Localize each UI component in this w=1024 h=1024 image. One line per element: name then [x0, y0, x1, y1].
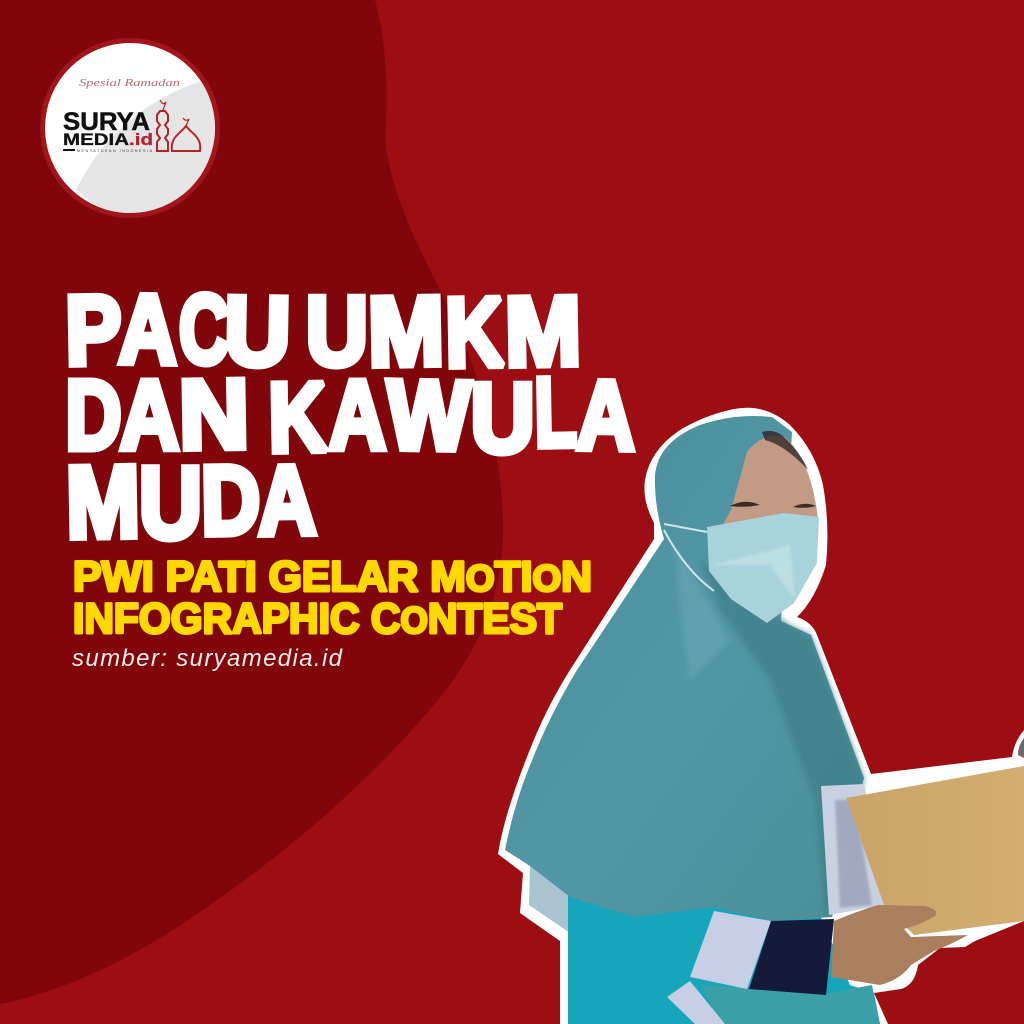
title word DAN	[66, 358, 250, 470]
title word PACU: C	[179, 274, 229, 384]
title word MUDA: A	[257, 445, 317, 555]
logo grey sheen	[76, 81, 215, 213]
title word KAWULA: A	[576, 360, 636, 470]
book	[821, 784, 885, 915]
white sticker outline	[498, 408, 1024, 1024]
under-scarf strip	[529, 866, 570, 933]
logo underline	[63, 149, 75, 151]
mask ear loop	[664, 524, 714, 591]
hijab highlight	[675, 545, 730, 680]
logo SURYA: SURYA	[63, 108, 150, 136]
shirt lower panel	[700, 985, 880, 1024]
dark wavy blob	[0, 0, 503, 1004]
envelope	[846, 766, 1024, 935]
title word KAWULA: A	[329, 360, 386, 470]
mask pleats	[712, 545, 795, 600]
title word KAWULA: K	[268, 362, 327, 473]
eye left	[730, 502, 760, 507]
hair line	[762, 431, 808, 470]
logo tagline: MENYATUKAN INDONESIA	[77, 149, 153, 153]
logo ring	[40, 38, 220, 218]
dark wrist glove	[749, 919, 834, 995]
subtitle line 2: INFOGRAPHIC CONTEST	[73, 595, 562, 643]
hijab	[505, 416, 864, 921]
title word PACU: A	[118, 274, 178, 384]
face mask	[707, 513, 819, 623]
striped cuff	[690, 911, 771, 989]
title word KAWULA: L	[534, 357, 578, 467]
title word MUDA	[65, 444, 317, 560]
teal shirt	[568, 893, 880, 1024]
source line: sumber: suryamedia.id	[72, 645, 343, 672]
subtitle	[73, 553, 592, 643]
title word UMKM: U	[306, 276, 368, 386]
title word UMKM: M	[367, 275, 445, 387]
logo MEDIA.id: MEDIA .id	[63, 130, 153, 149]
dome	[172, 126, 200, 151]
book print	[835, 800, 872, 908]
hand	[831, 905, 968, 985]
title word KAWULA	[268, 357, 636, 473]
hijab fold shade	[700, 560, 864, 915]
logo script text: Spesial Ramadan	[79, 77, 181, 89]
title word DAN: A	[120, 360, 179, 470]
title word MUDA: M	[65, 444, 141, 560]
title word MUDA: U	[139, 446, 202, 560]
title word PACU: P	[64, 274, 122, 385]
lower cuff	[667, 981, 725, 1024]
icon: mosque	[157, 100, 200, 151]
title word PACU: U	[224, 275, 291, 387]
person photo cut-out	[498, 408, 1024, 1024]
main title	[64, 274, 636, 560]
subtitle line 1: PWI PATI GELAR MOTION	[73, 553, 592, 601]
other person's hand	[1018, 738, 1024, 758]
eye right	[793, 504, 816, 508]
title word PACU	[64, 274, 291, 387]
title word UMKM: M	[504, 275, 582, 387]
title word KAWULA: W	[386, 359, 471, 471]
minaret	[157, 111, 168, 151]
title word DAN: N	[178, 358, 250, 470]
title word KAWULA: U	[471, 363, 535, 473]
logo badge	[40, 38, 225, 225]
title word MUDA: D	[200, 444, 261, 555]
face	[720, 436, 818, 530]
title word UMKM: K	[444, 277, 504, 388]
title word UMKM	[306, 275, 582, 388]
crescents	[160, 100, 189, 126]
title word DAN: D	[66, 360, 122, 470]
logo white disc	[45, 43, 215, 213]
